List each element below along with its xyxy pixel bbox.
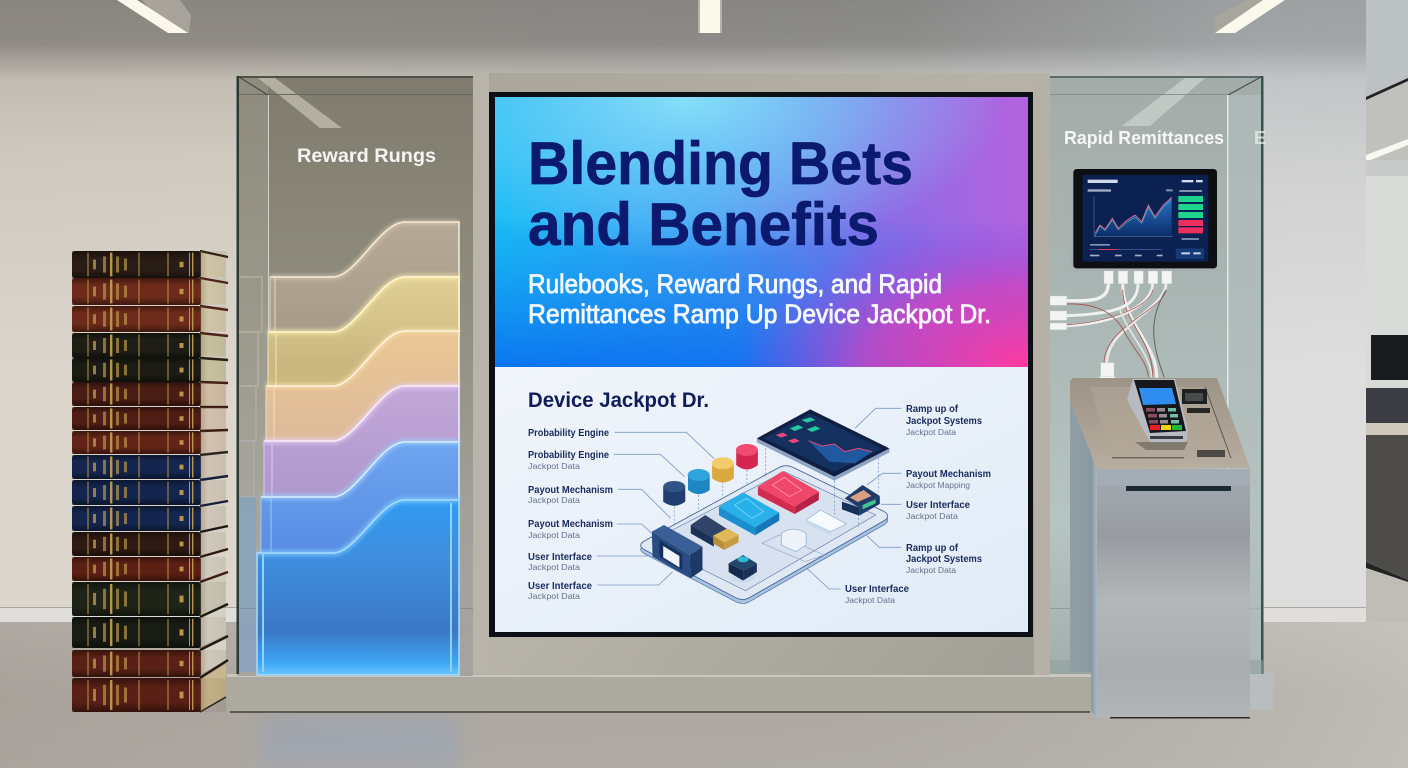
main title [528,130,913,258]
callout: Payout Mechanism lower [528,519,613,540]
subtitle: Remittances Ramp Up Device Jackpot Dr. [528,299,991,329]
subtitle [528,269,991,329]
callout: Probability Engine with caption [528,450,609,471]
book 16 [72,636,228,677]
callout: Ramp up of Jackpot Systems [906,404,982,437]
book 1 [72,251,228,278]
main title: Blending Bets [528,130,913,197]
small keypad cube [729,555,757,583]
monitor [1070,168,1218,270]
payment dashboard and cables [1050,168,1218,381]
callout: User Interface bottom [845,584,909,605]
callout: Payout Mechanism lower: Payout Mechanism [528,519,613,530]
book 9 [72,452,228,479]
callout: Ramp up of Jackpot Systems: Ramp up of [906,404,959,415]
gold can [712,457,734,482]
kiosk receipt slot [1126,486,1231,491]
callout: Probability Engine with caption: Probability Engine [528,450,609,461]
cable connectors [1050,271,1172,381]
callout: User Interface right [906,500,970,521]
left glass case [236,76,473,676]
blue can [688,469,710,494]
right small cube [842,485,880,516]
callout: User Interface lower: User Interface [528,581,592,592]
right glass case [1050,76,1264,674]
callout: Probability Engine: Probability Engine [528,428,609,439]
kiosk band [1097,469,1250,485]
kiosk side [1070,400,1097,718]
center display frame [473,73,1050,675]
screen top gradient panel [495,97,1028,367]
callout: Payout Mechanism with caption: Jackpot Data [528,496,581,505]
callout: User Interface: User Interface [528,552,592,563]
subtitle: Rulebooks, Reward Rungs, and Rapid [528,269,942,299]
book 14 [72,572,228,616]
rung 6 bright blue [257,500,459,675]
label: Reward Rungs: Reward Rungs [297,146,436,167]
rung 3 peach [266,331,459,500]
book 4 [72,333,228,358]
book 6 [72,382,228,406]
book 8 [72,430,228,454]
ceiling light center [698,0,722,33]
ceiling light left [117,0,191,33]
callout: User Interface right: User Interface [906,500,970,511]
book 3 [72,306,228,332]
card terminal [1127,379,1188,450]
stack of rulebooks [72,251,228,712]
white pad [806,510,846,535]
stage plinth [227,672,1273,711]
office area through opening [1366,0,1408,622]
book 5 [72,358,228,382]
white cup [781,529,806,552]
navy front box [652,525,702,578]
callout: Payout Mechanism lower: Jackpot Data [528,531,581,540]
heading: Device Jackpot Dr.: Device Jackpot Dr. [528,389,709,412]
chart: reward rungs glowing steps [257,222,459,675]
label: Rapid Remittances: Rapid Remittances [1064,128,1224,148]
status buttons [1178,196,1203,240]
callout: Ramp up of Jackpot Systems lower: Jackpot Data [906,566,957,575]
callout: Payout Mechanism right: Jackpot Mapping [906,481,970,490]
callout: Payout Mechanism right [906,469,991,490]
isometric device illustration [597,408,901,604]
callout: Payout Mechanism right: Payout Mechanism [906,469,991,480]
lower metrics [1090,244,1204,259]
callout: Payout Mechanism with caption: Payout Mechanism [528,485,613,496]
base plate [641,466,888,604]
floating tablet [757,409,889,481]
callout: Ramp up of Jackpot Systems lower: Jackpot Systems [906,554,982,565]
red can [736,444,758,469]
mirrored letter reflection: E [1254,128,1266,148]
callout: User Interface bottom: Jackpot Data [845,596,896,605]
dark module pair [691,515,739,550]
floor [0,568,1408,768]
book 10 [72,476,228,505]
callout: Ramp up of Jackpot Systems lower: Ramp up of [906,543,959,554]
ceiling light right [1213,0,1285,33]
panel: device jackpot diagram background [495,367,1028,632]
blue module [719,492,779,535]
callout: Payout Mechanism with caption [528,485,613,505]
book 13 [72,549,228,581]
rung 5 light blue [261,442,459,620]
dashboard header [1088,180,1203,192]
kiosk base line [1110,717,1250,718]
book 17 [72,660,228,712]
rung 4 lilac [264,386,459,560]
navy can [663,481,685,506]
callout: User Interface right: Jackpot Data [906,512,959,521]
callout: Probability Engine with caption: Jackpot Data [528,462,581,471]
kiosk front panel [1097,485,1250,718]
cable bundle [1067,283,1166,377]
kiosk control plate [1090,387,1232,458]
callout: Ramp up of Jackpot Systems lower [906,543,982,575]
kiosk payment terminal stand [1070,378,1250,718]
callout: Ramp up of Jackpot Systems: Jackpot Systems [906,416,982,427]
callout: Ramp up of Jackpot Systems: Jackpot Data [906,428,957,437]
leader lines [597,408,901,589]
dashed guides [674,448,878,527]
red module [758,471,819,514]
book 7 [72,407,228,430]
callout: User Interface [528,552,592,572]
main title: and Benefits [528,191,879,258]
callout: User Interface lower: Jackpot Data [528,592,581,601]
rung 2 yellow [268,277,459,450]
callout: User Interface bottom: User Interface [845,584,909,595]
kiosk sloped top [1070,378,1250,469]
book 2 [72,278,228,305]
back wall [0,0,1366,622]
callout: User Interface: Jackpot Data [528,563,581,572]
callout: User Interface lower [528,581,592,601]
book 11 [72,501,228,531]
rung 1 pale tan [270,222,459,400]
line chart [1094,196,1173,237]
book 12 [72,526,228,556]
book 15 [72,604,228,648]
